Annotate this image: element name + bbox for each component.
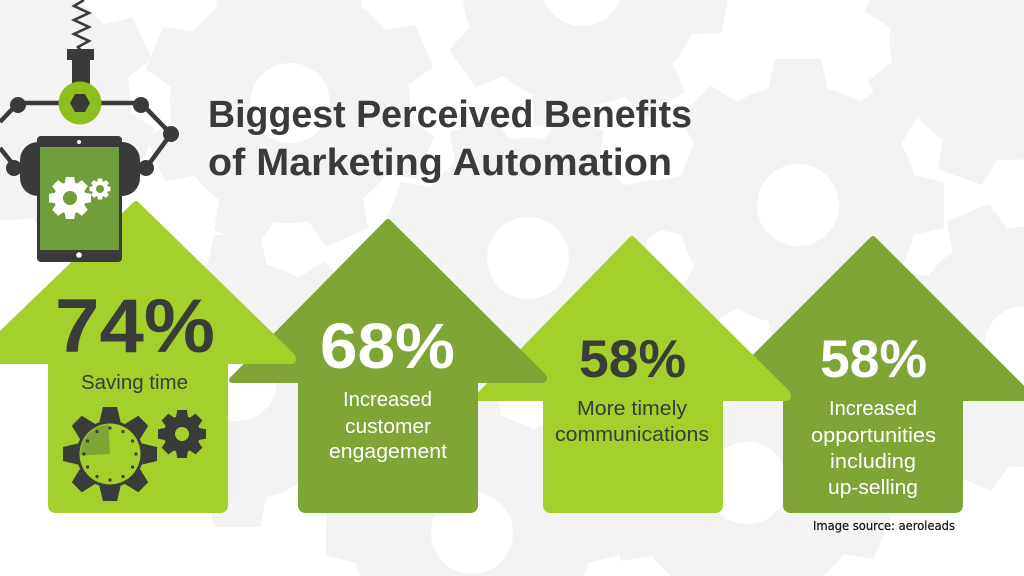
- label: increased opportunities: including: [830, 451, 916, 473]
- value 58% (opportunities): 58%: [820, 330, 927, 389]
- value 58% (communications): 58%: [579, 330, 686, 389]
- label: increased opportunities: up-selling: [828, 477, 918, 499]
- label: increased customer engagement: engagement: [329, 441, 447, 463]
- title: of Marketing Automation: [208, 142, 672, 184]
- label: increased opportunities: Increased: [829, 398, 917, 420]
- label: more timely communications: [555, 398, 709, 446]
- robot claw holding tablet: [0, 0, 179, 262]
- claw arms: [0, 103, 171, 168]
- value 68%: 68%: [320, 310, 455, 382]
- icon: clock gear: [63, 407, 157, 501]
- arrow 1: saving time: [0, 204, 293, 510]
- arrow 2: increased customer engagement: [232, 222, 544, 510]
- label: increased customer engagement: Increased: [343, 389, 432, 411]
- arrow 3: more timely communications: [477, 239, 788, 510]
- label: more timely communications: More timely: [577, 398, 687, 420]
- label: increased customer engagement: [329, 389, 447, 463]
- value 74%: 74%: [55, 284, 215, 369]
- title: [208, 94, 692, 184]
- label: increased opportunities: opportunities: [811, 425, 936, 447]
- title: Biggest Perceived Benefits: [208, 94, 692, 136]
- arrow 4: increased opportunities: [714, 239, 1024, 510]
- tablet: [37, 136, 122, 262]
- spring: [74, 0, 89, 52]
- label: saving time: Saving time: [81, 372, 188, 394]
- label: increased customer engagement: customer: [345, 416, 431, 438]
- label: more timely communications: communications: [555, 424, 709, 446]
- image source caption: Image source: aeroleads: [813, 519, 955, 533]
- icon: small gear: [158, 410, 206, 458]
- hub ring: [58, 82, 102, 124]
- icon: tablet gears: [49, 177, 110, 219]
- label: increased opportunities: [811, 398, 936, 499]
